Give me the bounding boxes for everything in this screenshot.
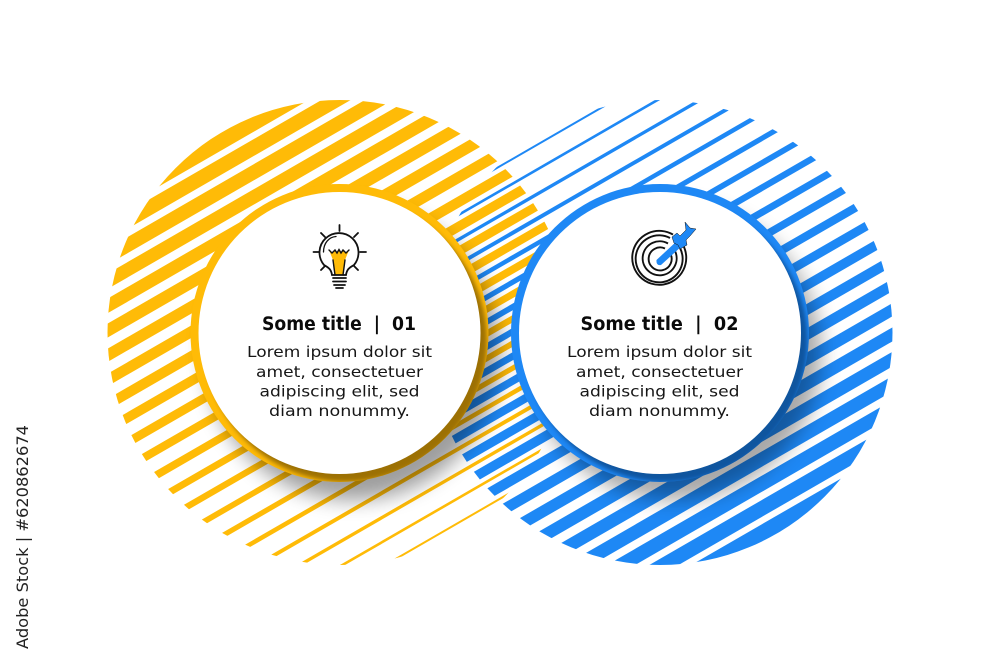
text block: description 02: Lorem ipsum dolor sit	[567, 343, 752, 361]
text block: description 02: amet, consectetuer	[576, 363, 744, 381]
text block: description 01	[247, 343, 432, 420]
side label: Adobe Stock | #620862674	[13, 425, 32, 649]
text block: description 02: diam nonummy.	[589, 402, 730, 420]
blue ring	[511, 184, 809, 482]
text block: description 01: adipiscing elit, sed	[260, 382, 420, 400]
striped disc: yellow	[108, 100, 548, 565]
text block: description 02: adipiscing elit, sed	[580, 382, 740, 400]
infographic	[16, 100, 892, 649]
white disc	[519, 192, 801, 474]
text block: description 01: Lorem ipsum dolor sit	[247, 343, 432, 361]
ring inner shadow	[526, 200, 808, 482]
yellow ring	[190, 184, 488, 482]
text block: description 01: diam nonummy.	[269, 402, 410, 420]
drop shadow: yellow ring	[206, 206, 500, 500]
text block: description 02	[567, 343, 752, 420]
white disc	[198, 192, 480, 474]
ring inner shadow	[205, 200, 487, 482]
panel: step 02	[511, 184, 809, 482]
panel: step 01	[190, 184, 488, 482]
text block: description 01: amet, consectetuer	[256, 363, 424, 381]
heading: some title 01: Some title | 01	[262, 314, 416, 335]
heading: some title 02: Some title | 02	[580, 314, 738, 335]
icon: light bulb	[314, 225, 366, 288]
icon: target with dart	[632, 222, 696, 285]
drop shadow: blue ring	[527, 206, 821, 500]
striped disc: blue	[452, 100, 892, 565]
